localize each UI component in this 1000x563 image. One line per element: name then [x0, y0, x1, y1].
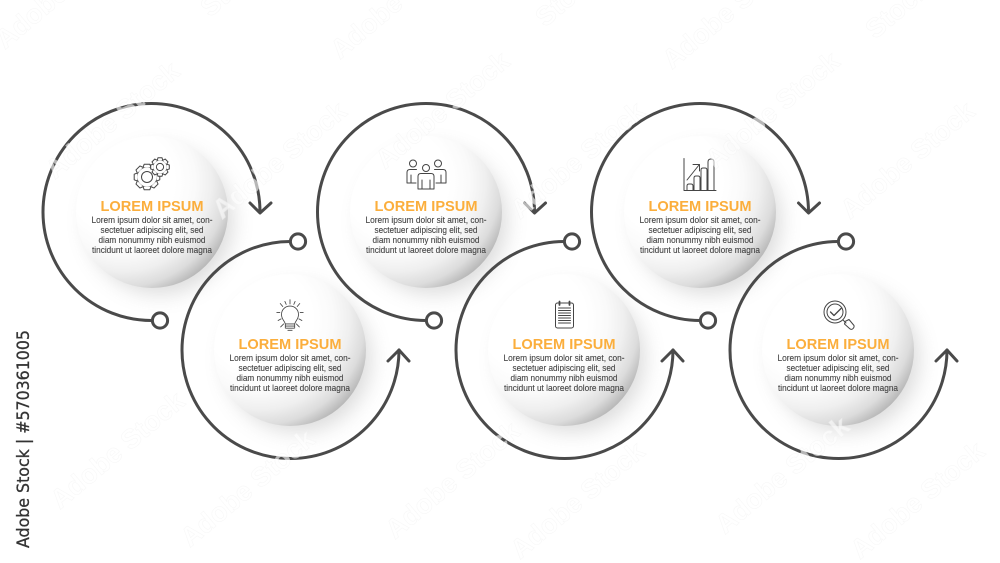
text block 1: tincidunt ut laoreet dolore magna [92, 244, 213, 255]
text block 3: sectetuer adipiscing elit, sed [374, 224, 478, 235]
panel: step 6 [730, 234, 957, 458]
text block 1: Lorem ipsum dolor sit amet, con- [92, 214, 212, 225]
stock watermark: faint diagonal pattern: Adobe Stock [370, 45, 516, 175]
text block 3: diam nonummy nibh euismod [372, 234, 480, 245]
text block 5: Lorem ipsum dolor sit amet, con- [640, 214, 760, 225]
text block 4: diam nonummy nibh euismod [510, 372, 618, 383]
stock watermark: faint diagonal pattern: Adobe Stock [845, 435, 991, 563]
stock watermark: faint diagonal pattern: Adobe Stock [700, 45, 846, 175]
sphere 6 [762, 274, 919, 432]
text block 1: sectetuer adipiscing elit, sed [100, 224, 204, 235]
text block 3: tincidunt ut laoreet dolore magna [366, 244, 487, 255]
heading 2: LOREM IPSUM [238, 336, 342, 353]
stock watermark: faint diagonal pattern: Adobe Stock [710, 410, 856, 540]
panel: step 2 [182, 234, 409, 458]
stock watermark: faint diagonal pattern: Adobe Stock [175, 423, 321, 553]
stock watermark: faint diagonal pattern: Adobe Stock [505, 435, 651, 563]
arrow ring 5 [592, 104, 820, 328]
panel: step 4 [456, 234, 683, 458]
arrow ring 4 [456, 234, 683, 458]
text block 4: sectetuer adipiscing elit, sed [512, 362, 616, 373]
text block 3: Lorem ipsum dolor sit amet, con- [366, 214, 486, 225]
sphere 1 [76, 136, 233, 294]
text block 1: diam nonummy nibh euismod [98, 234, 206, 245]
arrow ring 6 [730, 234, 957, 458]
text block 4 [504, 352, 625, 393]
icon: team [407, 160, 446, 189]
heading 1: LOREM IPSUM [100, 198, 204, 215]
text block 2 [230, 352, 351, 393]
panel: step 3 [318, 104, 546, 328]
heading 3: LOREM IPSUM [374, 198, 478, 215]
sphere 2 [214, 274, 371, 432]
text block 2: Lorem ipsum dolor sit amet, con- [230, 352, 350, 363]
text block 6: Lorem ipsum dolor sit amet, con- [778, 352, 898, 363]
stock watermark: faint diagonal pattern: Adobe Stock [505, 95, 651, 225]
sphere 3 [350, 136, 507, 294]
stock watermark: faint diagonal pattern: Adobe Stock [207, 95, 353, 225]
icon: light bulb [277, 300, 303, 330]
text block 3 [366, 214, 487, 255]
icon: notepad [556, 302, 574, 328]
panel: step 5 [592, 104, 820, 328]
arrow ring 2 [182, 234, 409, 458]
text block 2: tincidunt ut laoreet dolore magna [230, 382, 351, 393]
icon: gears [134, 158, 169, 190]
stock watermark: faint diagonal pattern: Adobe Stock [40, 55, 186, 185]
text block 1 [92, 214, 213, 255]
text block 5: tincidunt ut laoreet dolore magna [640, 244, 761, 255]
arrow ring 3 [318, 104, 546, 328]
text block 5: sectetuer adipiscing elit, sed [648, 224, 752, 235]
text block 6 [778, 352, 899, 393]
icon: magnifier with check [824, 301, 854, 329]
heading 4: LOREM IPSUM [512, 336, 616, 353]
stock watermark: faint diagonal pattern: Adobe Stock [835, 95, 981, 225]
stock watermark: faint diagonal pattern: Adobe Stock [45, 385, 191, 515]
text block 5: diam nonummy nibh euismod [646, 234, 754, 245]
arrow ring 1 [43, 104, 271, 328]
text block 2: sectetuer adipiscing elit, sed [238, 362, 342, 373]
heading 6: LOREM IPSUM [786, 336, 890, 353]
heading 5: LOREM IPSUM [648, 198, 752, 215]
sphere 4 [488, 274, 645, 432]
sphere 5 [624, 136, 781, 294]
stock id side label: Adobe Stock | #570361005 [14, 330, 34, 548]
text block 4: tincidunt ut laoreet dolore magna [504, 382, 625, 393]
text block 6: sectetuer adipiscing elit, sed [786, 362, 890, 373]
text block 2: diam nonummy nibh euismod [236, 372, 344, 383]
text block 6: tincidunt ut laoreet dolore magna [778, 382, 899, 393]
text block 6: diam nonummy nibh euismod [784, 372, 892, 383]
text block 5 [640, 214, 761, 255]
panel: step 1 [43, 104, 271, 328]
stock watermark: faint diagonal pattern: Adobe Stock [380, 415, 526, 545]
text block 4: Lorem ipsum dolor sit amet, con- [504, 352, 624, 363]
icon: growth chart [684, 158, 716, 190]
